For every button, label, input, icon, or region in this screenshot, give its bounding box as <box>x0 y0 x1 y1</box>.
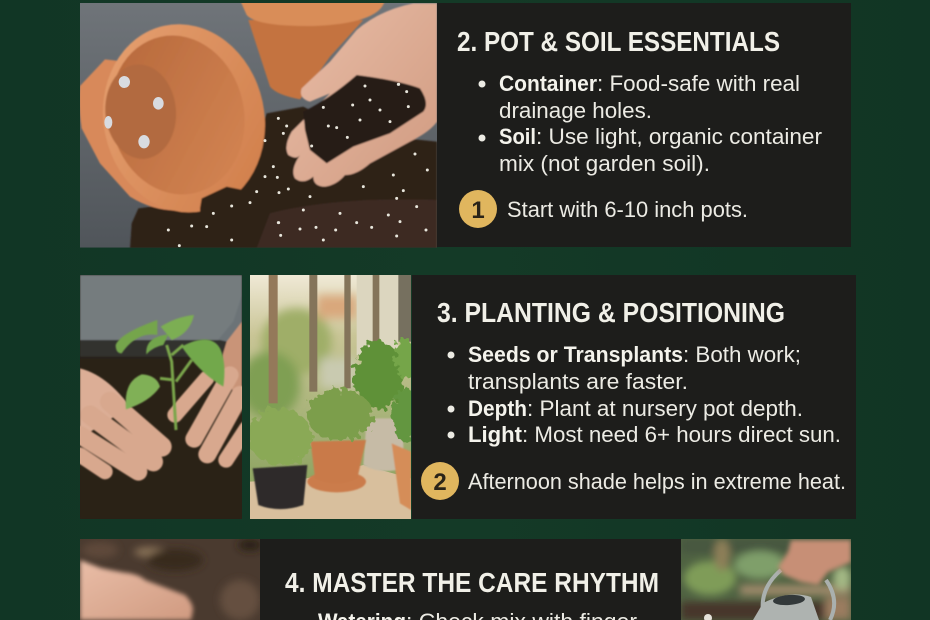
heading: 2. POT & SOIL ESSENTIALS <box>457 26 780 57</box>
bullet list <box>478 71 823 176</box>
tip badge 2 <box>421 462 459 500</box>
tip text: Afternoon shade helps in extreme heat. <box>468 469 846 494</box>
seedling <box>116 315 224 430</box>
bullet list: Soil <box>499 124 536 149</box>
bullet list: Container <box>499 71 597 96</box>
bullet list: : Food-safe with real <box>597 71 800 96</box>
bullet list: Seeds or Transplants <box>468 342 683 367</box>
hands <box>80 368 247 472</box>
bullet list: mix (not garden soil). <box>499 151 710 176</box>
panel: pot and soil essentials <box>437 3 851 247</box>
bullet list: Depth <box>468 396 527 421</box>
panel: planting and positioning <box>412 275 856 519</box>
panel: master the care rhythm <box>260 539 681 620</box>
bullet list: transplants are faster. <box>468 369 688 394</box>
hand holding handle <box>778 540 851 585</box>
photo: watering can in garden <box>681 539 851 620</box>
watering can body <box>704 594 819 620</box>
watering can handle <box>763 570 834 620</box>
tip badge 2: 2 <box>433 469 447 496</box>
bullet list: : Use light, organic container <box>536 124 823 149</box>
bullet list: Light <box>468 422 522 447</box>
bullet list: : Both work; <box>683 342 801 367</box>
bullet list <box>448 342 841 447</box>
photo: potted herbs on a sunny balcony <box>240 275 417 519</box>
photo: terracotta pots and potting soil in hand <box>79 0 437 248</box>
herb foliage <box>353 337 417 443</box>
bullet list: : Plant at nursery pot depth. <box>527 396 803 421</box>
tip badge 1: 1 <box>471 197 485 224</box>
bullet list: drainage holes. <box>499 98 652 123</box>
heading: 4. MASTER THE CARE RHYTHM <box>285 567 659 598</box>
heading: 3. PLANTING & POSITIONING <box>437 297 785 328</box>
tip badge 1 <box>459 190 497 228</box>
drainage holes <box>104 76 164 148</box>
photo: hands planting a seedling <box>80 275 247 519</box>
bullet list: : Most need 6+ hours direct sun. <box>522 422 841 447</box>
perlite specks <box>168 84 427 246</box>
photo: hand working soil <box>80 539 262 620</box>
tip text: Start with 6-10 inch pots. <box>507 197 748 222</box>
